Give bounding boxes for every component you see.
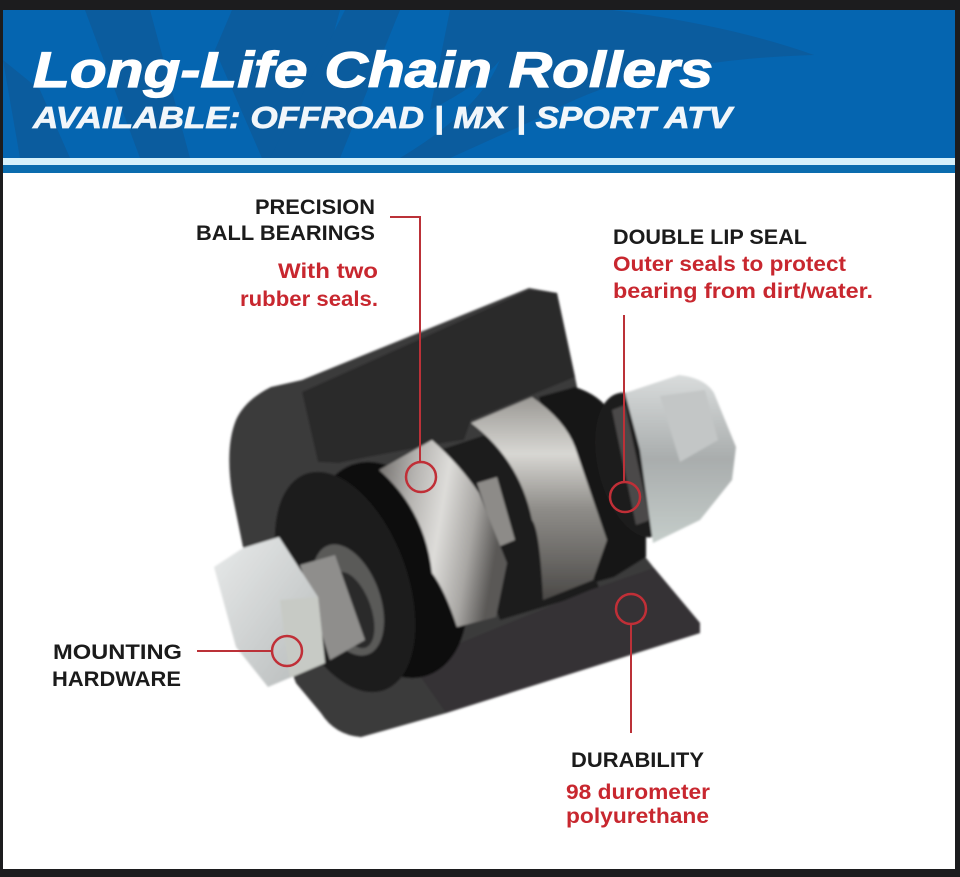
bearing seal front: [284, 440, 496, 700]
callout: precision ball bearings: With two: [278, 260, 378, 283]
hub: [298, 535, 398, 665]
callout: mounting hardware: HARDWARE: [52, 668, 181, 691]
right nut washer: [581, 384, 691, 546]
callout: durability: polyurethane: [566, 805, 709, 828]
hub inner: [320, 566, 384, 654]
right shaft: [612, 405, 650, 525]
callout: double lip seal: [610, 226, 873, 512]
right seal: [539, 387, 646, 585]
callout: double lip seal: Outer seals to protect: [613, 253, 846, 276]
header stripes: [3, 158, 955, 173]
callout: double lip seal: bearing from dirt/water.: [613, 280, 873, 303]
bolt shaft: [300, 555, 365, 660]
header banner: [3, 10, 955, 173]
callout: precision ball bearings: [196, 196, 436, 492]
second bearing: [471, 397, 607, 600]
header subtitle: AVAILABLE: OFFROAD | MX | SPORT ATV: [32, 100, 735, 135]
lower block: [411, 568, 700, 713]
header title: Long-Life Chain Rollers: [33, 42, 713, 98]
header swoosh pattern: [3, 10, 814, 158]
chain roller illustration: [214, 288, 736, 737]
right nut: [625, 375, 736, 543]
callout: precision ball bearings: rubber seals.: [240, 288, 378, 311]
callout: double lip seal: DOUBLE LIP SEAL: [613, 226, 807, 249]
callout: precision ball bearings: PRECISION: [255, 196, 375, 219]
upper block: [302, 290, 575, 463]
wheel body: [229, 288, 700, 737]
bolt head facet: [280, 597, 325, 678]
shaft dark: [440, 420, 600, 620]
front disc: [247, 453, 443, 711]
callout: precision ball bearings: BALL BEARINGS: [196, 222, 375, 245]
callout: mounting hardware: [52, 636, 302, 691]
shaft silver: [477, 477, 515, 547]
callout: durability: [566, 594, 710, 828]
first bearing: [379, 440, 507, 627]
wheel lower side: [296, 663, 446, 737]
callout: durability: DURABILITY: [571, 749, 704, 772]
callout: durability: 98 durometer: [566, 781, 710, 804]
bolt head: [214, 537, 325, 687]
callout: mounting hardware: MOUNTING: [53, 641, 182, 664]
nut facet: [660, 390, 718, 462]
